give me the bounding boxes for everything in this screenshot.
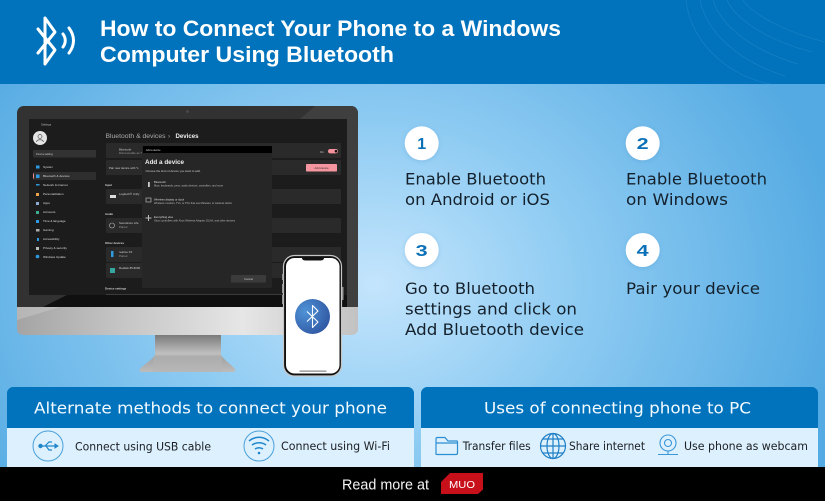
user avatar [33, 131, 47, 145]
sidebar menu [33, 165, 96, 259]
screen: settings window [29, 119, 347, 295]
monitor body [17, 106, 358, 335]
screen: settings window: Input [105, 183, 112, 187]
device rows [106, 143, 341, 295]
footer bar [0, 467, 825, 501]
dialog: add a device: Bluetooth [154, 180, 166, 184]
step 3: 3 [416, 243, 428, 260]
screen: settings window: Settings [41, 122, 52, 126]
label: share internet: Share internet [569, 439, 645, 453]
label: wifi: Connect using Wi-Fi [281, 439, 390, 453]
add device button: Add device [314, 166, 329, 170]
dialog: add a device: Add a device [145, 160, 185, 166]
step 4 [626, 233, 760, 298]
sidebar menu: Personalization [43, 192, 64, 196]
sidebar menu: Accounts [43, 210, 56, 214]
screen heading: › [168, 133, 170, 140]
step 1: 1 [417, 136, 426, 153]
title: How to Connect Your Phone to a Windows [100, 16, 561, 41]
sidebar menu: Gaming [43, 228, 54, 232]
sidebar menu: Bluetooth & devices [43, 174, 70, 178]
stand [140, 335, 235, 372]
dialog: add a device: Wireless monitors, TVs, or PCs that use Miracast, or wireless docks [154, 201, 232, 205]
dialog: add a device: Cancel [244, 277, 253, 281]
icon: bluetooth badge [295, 299, 330, 334]
step 4: Pair your device [626, 279, 760, 298]
illustration: phone with bluetooth logo [282, 256, 344, 376]
illustration: monitor with settings screen [17, 106, 358, 372]
step 3: Add Bluetooth device [405, 320, 584, 339]
step 3: Go to Bluetooth [405, 279, 535, 298]
step 2 [626, 126, 767, 209]
step 1 [405, 126, 550, 209]
panel: uses [421, 387, 818, 467]
sidebar menu: System [43, 165, 54, 169]
title [100, 16, 561, 67]
screen: settings window: Discoverable as "L [119, 151, 143, 155]
step 2: on Windows [626, 190, 728, 209]
icon: globe [540, 434, 566, 458]
step 3: settings and click on [405, 300, 577, 319]
dialog: add a device: Xbox controllers with Xbox Wireless Adapter, DLNA, and other devices [154, 218, 236, 222]
icon: webcam [658, 435, 678, 454]
screen: settings window: Pair new device with "L [109, 166, 139, 170]
header banner [0, 0, 825, 84]
steps [405, 126, 767, 339]
panel heading: Uses of connecting phone to PC [484, 398, 751, 418]
screen: settings window: Realtek 85.8000 [119, 266, 140, 270]
sidebar menu: Time & language [43, 219, 66, 223]
row icons [110, 195, 116, 273]
screen: settings window: Paired [119, 225, 128, 229]
screen: settings window: realme X2 [119, 250, 133, 254]
dialog: add a device: Wireless display or dock [154, 198, 185, 202]
icon: wifi [244, 431, 274, 461]
icon: usb [33, 431, 63, 461]
step 1: on Android or iOS [405, 190, 550, 209]
logo: MUO [441, 473, 483, 494]
screen: settings window: Soundcore Life [119, 221, 139, 225]
sidebar menu: Apps [43, 201, 50, 205]
panel: alternate methods [7, 387, 414, 467]
label: transfer files: Transfer files [462, 439, 531, 453]
search box [33, 150, 96, 158]
panel heading: Alternate methods to connect your phone [34, 398, 387, 418]
screen heading [106, 133, 199, 140]
title: Computer Using Bluetooth [100, 42, 394, 67]
dialog: add a device: Mice, keyboards, pens, audio devices, controllers, and more [154, 184, 224, 188]
sidebar menu: Windows Update [43, 255, 66, 259]
sidebar menu: Network & internet [43, 183, 68, 187]
screen: settings window: Other devices [105, 241, 125, 245]
screen: settings window: Paired [119, 254, 128, 258]
icon: folder [436, 438, 458, 454]
footer text: Read more at [342, 476, 430, 493]
dialog: add a device: Everything else [154, 215, 174, 219]
screen: settings window: Audio [105, 212, 113, 216]
dialog: add a device: Add a device [146, 149, 161, 152]
screen heading: Devices [176, 133, 199, 140]
step 4: 4 [637, 243, 649, 260]
step 3 [405, 233, 584, 339]
dialog: add a device [142, 146, 272, 288]
screen: settings window: Bluetooth [119, 148, 132, 152]
add device button [306, 164, 337, 172]
step 2: 2 [637, 136, 649, 153]
step 2: Enable Bluetooth [626, 170, 767, 188]
icon: bluetooth signal [38, 18, 74, 64]
logo: MUO: MUO [449, 480, 475, 491]
screen: settings window: On [320, 150, 324, 154]
sidebar menu: Accessibility [43, 237, 60, 241]
toggle switch [328, 149, 338, 153]
label: usb: Connect using USB cable [75, 440, 211, 454]
screen heading: Bluetooth & devices [106, 133, 166, 140]
screen: settings window: Logitech® Unify [119, 192, 140, 196]
screen: settings window: Device settings [105, 286, 127, 290]
step 1: Enable Bluetooth [405, 170, 546, 188]
search box: Find a setting [36, 152, 53, 156]
label: webcam: Use phone as webcam [684, 439, 808, 453]
dialog: add a device: Choose the kind of device you want to add. [146, 169, 201, 173]
sidebar menu: Privacy & security [43, 246, 67, 250]
